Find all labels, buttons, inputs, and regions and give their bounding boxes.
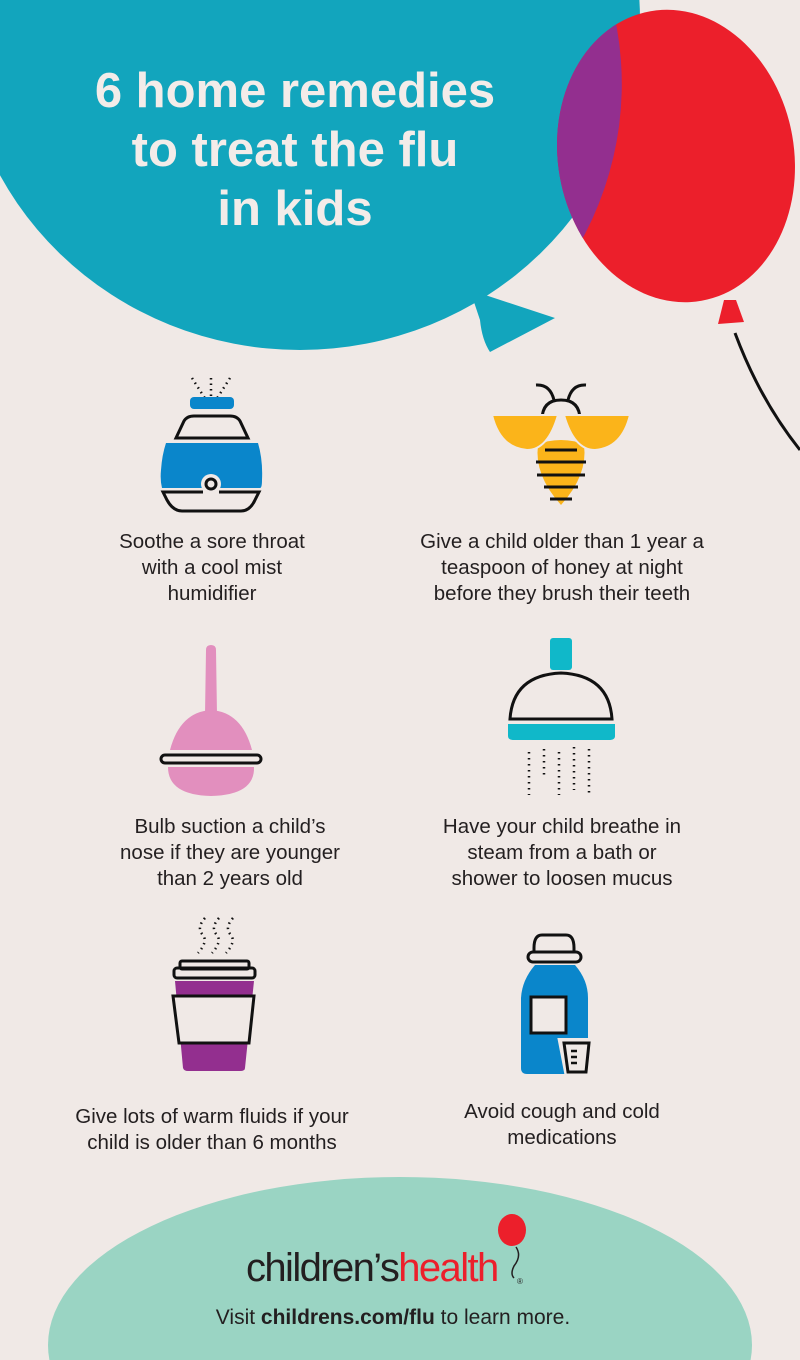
title	[95, 64, 495, 236]
caption: bulb suction	[120, 815, 340, 890]
logo text: children’shealth	[246, 1246, 498, 1290]
caption: bulb suction: Bulb suction a child’s	[134, 815, 326, 838]
caption: fluids: Give lots of warm fluids if your	[75, 1105, 349, 1128]
logo	[246, 1214, 526, 1290]
title: to treat the flu	[132, 123, 458, 177]
caption: bulb suction: nose if they are younger	[120, 841, 340, 864]
caption: honey: Give a child older than 1 year a	[420, 530, 704, 553]
caption: steam	[443, 815, 681, 890]
caption: humidifier: humidifier	[168, 582, 256, 605]
caption: medications: Avoid cough and cold	[464, 1100, 660, 1123]
icon: bee	[493, 384, 629, 505]
logo balloon: ®	[517, 1277, 523, 1286]
icon: medicine bottle	[521, 934, 591, 1074]
caption: humidifier: with a cool mist	[142, 556, 282, 579]
caption: fluids: child is older than 6 months	[87, 1131, 337, 1154]
caption: steam: steam from a bath or	[467, 841, 657, 864]
caption: honey: before they brush their teeth	[434, 582, 690, 605]
footer text: Visit childrens.com/flu to learn more.	[216, 1306, 570, 1329]
speech bubble	[0, 0, 640, 352]
caption: medications: medications	[507, 1126, 617, 1149]
caption: bulb suction: than 2 years old	[157, 867, 303, 890]
caption: humidifier: Soothe a sore throat	[119, 530, 305, 553]
caption: humidifier	[119, 530, 305, 605]
icon: shower	[508, 638, 615, 795]
footer ellipse	[48, 1177, 752, 1360]
icon: bulb syringe	[160, 645, 262, 796]
icon: warm cup	[171, 917, 256, 1071]
caption: medications	[464, 1100, 660, 1149]
caption: steam: Have your child breathe in	[443, 815, 681, 838]
caption: honey: teaspoon of honey at night	[441, 556, 683, 579]
title: in kids	[217, 182, 373, 236]
title: 6 home remedies	[95, 64, 495, 118]
caption: fluids	[75, 1105, 349, 1154]
icon: humidifier	[160, 377, 262, 512]
red balloon	[557, 10, 800, 451]
caption: steam: shower to loosen mucus	[451, 867, 673, 890]
logo balloon	[498, 1214, 526, 1286]
caption: honey	[420, 530, 704, 605]
